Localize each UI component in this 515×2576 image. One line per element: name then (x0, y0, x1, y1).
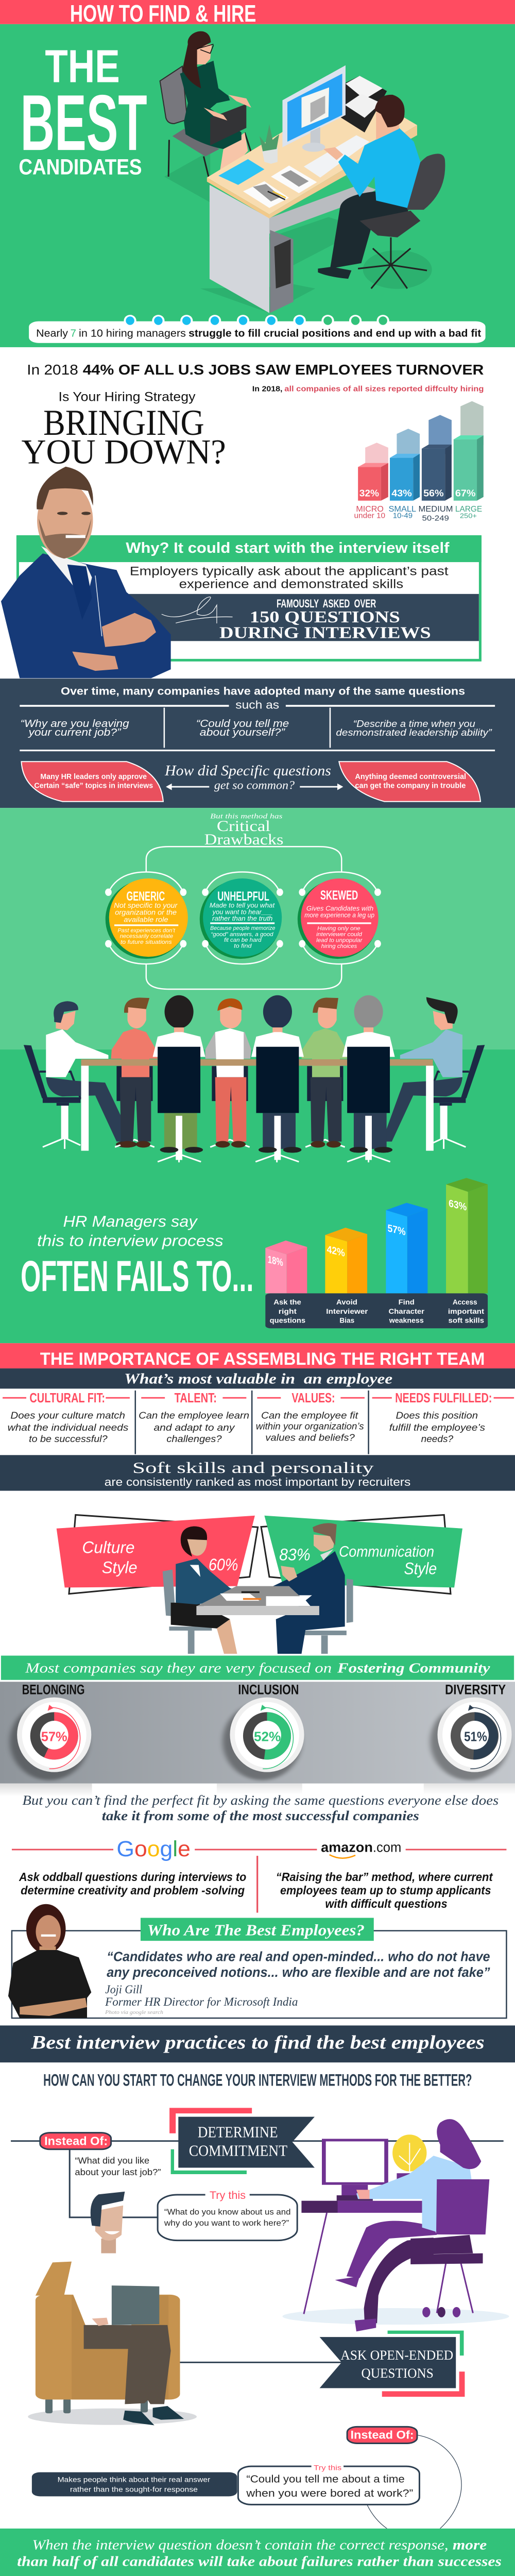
figure: front person grey (205, 998, 251, 1147)
text block: sample questions (21, 718, 492, 738)
figure: front person green (301, 997, 348, 1147)
icon: generic circle: necessarily correlate (120, 933, 173, 939)
logo: amazon: .com (373, 1840, 401, 1855)
callout: 150 questions: 150 QUESTIONS (250, 608, 400, 626)
heading: critical drawbacks (204, 812, 283, 848)
heading banner: soft skills: Soft skills and personality (132, 1459, 374, 1477)
bar chart: interview failures: right (279, 1308, 297, 1315)
column: talent: challenges? (166, 1433, 222, 1444)
icon: chair bases (158, 1154, 390, 1162)
heading: critical drawbacks: Drawbacks (204, 831, 283, 848)
column: values: Can the employee fit (261, 1410, 358, 1421)
icon: generic circle: GENERIC (127, 889, 165, 903)
panel: drawbacks and team meeting: UNHELPFUL (217, 889, 269, 903)
main title (19, 40, 147, 179)
table (196, 1586, 319, 1615)
heading banner: fostering community: Most companies say they are very focused on (25, 1660, 332, 1676)
bar chart: difficulty by company size: MICRO (356, 504, 384, 514)
bar chart: interview failures: Ask the (273, 1298, 301, 1307)
illustration: interview at desk: Style (404, 1559, 437, 1578)
icon: generic circle: organization or the (115, 909, 177, 917)
panel: drawbacks and team meeting (0, 872, 515, 1343)
chart: diversity 51 percent: 51% (464, 1729, 487, 1744)
text block: sample questions: “Why are you leaving (21, 718, 129, 730)
banner: determine commitment (169, 2108, 315, 2174)
subheading banner: most valuable (0, 1368, 515, 1388)
heading: hr managers say (37, 1213, 224, 1249)
label: such as: such as (235, 698, 279, 711)
heading: who are the best employees (141, 1918, 374, 1941)
bar chart: interview failures: Avoid (336, 1298, 357, 1307)
bar chart: interview failures: 18% (268, 1253, 283, 1268)
text block: sample questions: about yourself?” (200, 726, 285, 738)
quote (107, 1949, 490, 1979)
stat pill (29, 321, 486, 343)
panel: soft skills: INCLUSION (238, 1682, 299, 1698)
figure: right side person (382, 997, 485, 1149)
figure: back person one (153, 995, 205, 1160)
text block: google method: Ask oddball questions during interviews to (19, 1871, 246, 1884)
bar chart: difficulty by company size: LARGE (455, 504, 482, 514)
illustration: interview at desk: 60% (209, 1555, 238, 1574)
bar chart: interview failures: Interviewer (326, 1308, 368, 1315)
icon: skewed circle: lead to unpopular (316, 937, 363, 943)
text block: employers (130, 564, 449, 591)
arrow: left (166, 784, 209, 790)
column: cultural fit (3, 1391, 130, 1444)
stat pill: in 10 hiring managers (79, 328, 186, 339)
figure: back person three (342, 995, 395, 1160)
bar chart: difficulty by company size: SMALL (388, 504, 416, 514)
icon: generic circle: Not specific to your (114, 902, 178, 910)
panel: common questions (0, 679, 515, 1050)
chart: inclusion 52 percent: 52% (254, 1729, 281, 1744)
figure: man (269, 1523, 353, 1654)
icon: generic circle: to future situations (121, 938, 172, 945)
chart: belonging 57 percent: 57% (41, 1729, 67, 1744)
arrow: curve connector (367, 2435, 461, 2529)
heading: bringing you down: YOU DOWN? (21, 432, 226, 471)
chart: diversity 51 percent (430, 1682, 512, 1780)
illustration: interview at desk (57, 1515, 462, 1654)
icon: unhelpful circle: to find (234, 942, 252, 949)
callout: safe topics: Many HR leaders only approve (40, 773, 147, 781)
panel: ask open-ended questions (0, 2331, 515, 2576)
bar chart: interview failures: Access (453, 1298, 477, 1307)
heading: how did specific questions: get so common? (214, 778, 295, 792)
label: culture style: Style (102, 1558, 138, 1577)
logo: amazon: amazon (321, 1840, 373, 1855)
icon: skewed circle: hiring choices (321, 943, 357, 950)
pill: explanation: Makes people think about their real answer (58, 2476, 211, 2484)
icon: skewed circle: Gives Candidates with (306, 905, 373, 912)
callout: 150 questions (128, 594, 479, 641)
heading banner: best practices (0, 2025, 515, 2062)
attribution: Former HR Director for Microsoft India (105, 1995, 298, 2008)
panel: seven in ten stat (1, 315, 486, 678)
icon: generic circle (105, 872, 188, 964)
icon: generic circle: available role (124, 916, 168, 924)
heading: bringing you down (21, 389, 226, 471)
icon: unhelpful circle (200, 872, 283, 964)
heading: critical drawbacks: But this method has (210, 812, 283, 820)
pill: explanation (32, 2472, 237, 2496)
bar chart: difficulty by company size: 67% (455, 488, 476, 499)
banner: open-ended: QUESTIONS (362, 2366, 434, 2381)
bar chart: difficulty by company size: 56% (423, 488, 444, 499)
bar chart: interview failures: Find (399, 1298, 415, 1307)
bar chart: interview failures (265, 1178, 488, 1328)
column: talent: Can the employee learn (139, 1410, 249, 1421)
icon: unhelpful circle: rather than the truth (212, 914, 272, 922)
bubble: try this (238, 2464, 419, 2504)
table (81, 1059, 434, 1151)
stat pill: Nearly (36, 328, 68, 339)
illustration: team at meeting table (24, 995, 485, 1160)
pill: instead of: Instead Of: (350, 2429, 414, 2441)
bar chart: interview failures: Character (388, 1308, 424, 1315)
heading: critical drawbacks: Critical (217, 818, 270, 835)
label: culture style (82, 1538, 238, 1577)
panel: best interview practices (0, 2025, 515, 2425)
heading: bringing you down: Is Your Hiring Strategy (59, 389, 196, 404)
panel: why interview callout (16, 536, 482, 660)
text block: google method (19, 1871, 246, 1897)
illustration: woman at computer (282, 2119, 509, 2331)
bar chart: interview failures: important (448, 1308, 484, 1315)
pill: instead of: Instead Of: (44, 2135, 108, 2148)
heading: how did specific questions (164, 762, 331, 792)
bar chart: difficulty by company size: under 10 (354, 511, 385, 520)
callout: safe topics (21, 761, 163, 802)
banner: determine commitment: DETERMINE (198, 2124, 278, 2141)
heading: who are the best employees: Who Are The Best Employees? (147, 1921, 365, 1939)
main title: CANDIDATES (19, 155, 142, 179)
pill: explanation: rather than the sought-for response (70, 2486, 198, 2494)
heading: how did specific questions: How did Specific questions (164, 762, 331, 778)
column: needs fulfilled: needs? (421, 1433, 453, 1444)
panel: successful companies (0, 1784, 515, 2018)
photo: joji gill (8, 1904, 91, 2018)
stat pill: 7 (70, 328, 76, 339)
label: such as (20, 698, 495, 711)
bar chart: difficulty by company size: 250+ (460, 512, 477, 519)
bar chart: difficulty by company size: 43% (391, 488, 412, 499)
icon: unhelpful circle: you want to hear___ (212, 908, 272, 916)
chart: belonging 57 percent (10, 1682, 91, 1780)
bubble: try this: why do you want to work here?” (164, 2218, 289, 2227)
callout banner: failures (0, 2529, 515, 2576)
arrow: right (300, 784, 343, 790)
bubble: try this: when you were bored at work?” (246, 2487, 413, 2499)
column: cultural fit: what the individual needs (8, 1422, 128, 1433)
logo: google: Google (116, 1837, 191, 1861)
heading banner: soft skills (0, 1455, 515, 1491)
column: talent: and adapt to any (153, 1422, 235, 1433)
bubble: try this (158, 2189, 297, 2241)
text: instead quote: “What did you like (75, 2156, 149, 2165)
figure: back person two (251, 995, 304, 1160)
heading: bringing you down: BRINGING (43, 402, 204, 443)
heading banner: fostering community (1, 1656, 514, 1680)
icon: skewed circle: SKEWED (320, 888, 358, 903)
main title: THE (45, 40, 120, 92)
bar chart: interview failures: weakness (389, 1317, 424, 1325)
panel: hero: BEST (21, 79, 147, 167)
bubble: try this: “What do you know about us and (164, 2207, 290, 2216)
column: needs fulfilled (372, 1391, 514, 1444)
subheading: difficulty hiring: In 2018, (252, 384, 282, 393)
heading: hr managers say: HR Managers say (63, 1213, 198, 1230)
callout: safe topics: Certain “safe” topics in interviews (34, 782, 153, 790)
bar chart: difficulty by company size (354, 401, 484, 522)
icon: unhelpful circle: Because people memorize (210, 925, 275, 931)
panel: often fails to (0, 1154, 515, 1454)
attribution (105, 1983, 298, 2015)
bar chart: difficulty by company size: MEDIUM (419, 504, 453, 514)
label: communication style (279, 1543, 437, 1578)
text: instead quote: about your last job?” (75, 2167, 161, 2177)
bar chart: difficulty by company size: 50-249 (422, 514, 449, 522)
heading: hr managers say: this to interview process (37, 1232, 224, 1249)
icon: unhelpful circle: “good” answers, a good (211, 930, 273, 938)
text block: sample questions: “Could you tell me (196, 718, 289, 730)
pill: instead of (347, 2427, 417, 2443)
icon: skewed circle: interviewer could (316, 931, 362, 938)
text block: google method: determine creativity and problem -solving (21, 1884, 245, 1897)
column: values (256, 1391, 365, 1443)
title banner: HOW TO FIND & HIRE (70, 0, 256, 27)
column: values: VALUES: (291, 1391, 335, 1405)
illustration: smiling man in armchair (28, 2192, 197, 2425)
bar chart: interview failures: 57% (388, 1222, 406, 1238)
text: instead quote (75, 2156, 161, 2177)
figure: woman (163, 1526, 240, 1654)
callout banner: failures: more (453, 2537, 487, 2553)
bar chart: interview failures: 63% (449, 1197, 467, 1213)
bar chart: interview failures: soft skills (449, 1317, 484, 1325)
bar chart: difficulty by company size: 10-49 (393, 511, 413, 520)
icon: skewed circle: more experience a leg up (304, 911, 374, 919)
bar chart: interview failures: 42% (327, 1243, 345, 1259)
bar chart: interview failures: questions (270, 1317, 305, 1325)
attribution: Joji Gill (105, 1983, 142, 1996)
bubble: try this: “Could you tell me about a time (246, 2473, 405, 2485)
column: cultural fit: CULTURAL FIT: (29, 1391, 105, 1405)
column: cultural fit: to be successful? (29, 1433, 108, 1444)
heading: turnover: In 2018 (27, 361, 78, 378)
panel: best employees quote (12, 1918, 506, 2018)
text block: amazon method (276, 1871, 493, 1910)
figure: front person coral (111, 997, 158, 1147)
column: values: values and beliefs? (265, 1432, 355, 1443)
column: values: within your organization’s (256, 1421, 364, 1432)
photo: businessman with crossed arms (1, 467, 171, 678)
text block: sample questions: your current job?” (28, 726, 122, 738)
icon: generic circle: Past experiences don’t (117, 927, 176, 934)
icon: unhelpful circle: fit can be hard (224, 937, 262, 943)
bar chart: interview failures: Bias (339, 1317, 354, 1325)
bubble: try this: Try this (210, 2189, 246, 2201)
column: cultural fit: Does your culture match (10, 1410, 125, 1421)
label: culture style: Culture (82, 1538, 134, 1556)
panel: soft skills: BELONGING (22, 1682, 85, 1698)
icon: skewed circle: Having only one (317, 925, 360, 931)
callout: controversial (339, 761, 480, 802)
pill: instead of (40, 2133, 111, 2149)
icon row: ten dots (124, 315, 389, 327)
column: talent: TALENT: (175, 1391, 217, 1405)
label: communication style: 83% (279, 1546, 311, 1564)
icon: skewed circle (298, 872, 381, 964)
banner: open-ended (320, 2331, 465, 2397)
text block: same questions (22, 1792, 499, 1823)
illustration: office interview desk (160, 31, 445, 313)
banner: determine commitment: COMMITMENT (189, 2142, 287, 2159)
column: talent (139, 1391, 249, 1444)
figure: left side person (24, 1001, 137, 1149)
chart: inclusion 52 percent (222, 1682, 304, 1780)
bubble: try this: Try this (314, 2464, 341, 2472)
icon: unhelpful circle: Made to tell you what (210, 902, 275, 909)
panel: hero (0, 0, 515, 347)
panel: soft skills (0, 1455, 515, 1784)
attribution: Photo via google search (105, 2009, 163, 2015)
bar chart: difficulty by company size: 32% (359, 488, 379, 499)
